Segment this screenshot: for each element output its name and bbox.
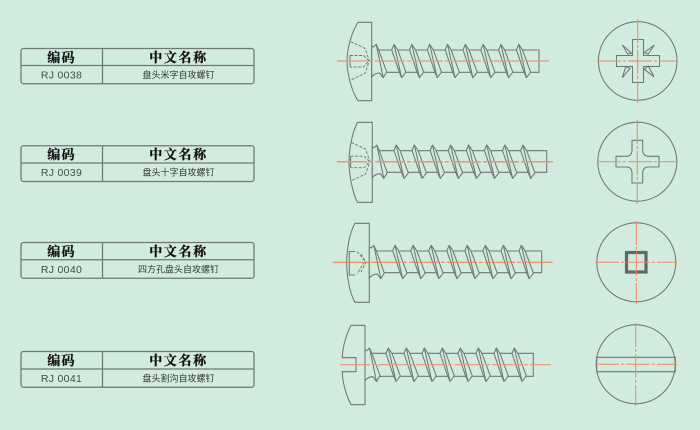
header: code: 编码 — [47, 50, 76, 65]
side view: screw RJ 0041 — [340, 325, 551, 405]
header: code: 编码 — [47, 147, 76, 162]
side view: screw RJ 0039 — [337, 122, 553, 202]
header: code: 编码 — [47, 353, 76, 368]
header: Chinese name: 中文名称 — [149, 244, 208, 259]
header: code: 编码 — [47, 244, 76, 259]
code value: RJ 0040 — [41, 264, 82, 276]
head view: star-cross recess RJ 0038 — [597, 19, 678, 103]
head view: cross recess RJ 0039 — [597, 120, 678, 204]
table: RJ 0041 — [21, 352, 254, 387]
header: Chinese name: 中文名称 — [149, 147, 208, 162]
side view: screw RJ 0038 — [337, 22, 549, 101]
code value: RJ 0041 — [41, 373, 82, 385]
header: Chinese name: 中文名称 — [149, 50, 208, 65]
table: RJ 0038 — [21, 48, 254, 84]
code value: RJ 0039 — [41, 167, 82, 179]
product name: 四方孔盘头自攻螺钉 — [138, 263, 219, 274]
table: RJ 0040 — [21, 242, 254, 278]
square recess — [349, 252, 366, 275]
header: Chinese name: 中文名称 — [149, 353, 208, 368]
product name: 盘头十字自攻螺钉 — [142, 166, 215, 178]
code value: RJ 0038 — [41, 70, 82, 82]
head view: slotted recess RJ 0041 — [595, 323, 677, 406]
star spikes — [622, 45, 654, 78]
table: RJ 0039 — [21, 146, 254, 182]
product name: 盘头米字自攻螺钉 — [142, 69, 215, 80]
side view: screw RJ 0040 — [333, 223, 553, 302]
head view: square recess RJ 0040 — [595, 221, 677, 304]
product name: 盘头割沟自攻螺钉 — [142, 372, 215, 383]
